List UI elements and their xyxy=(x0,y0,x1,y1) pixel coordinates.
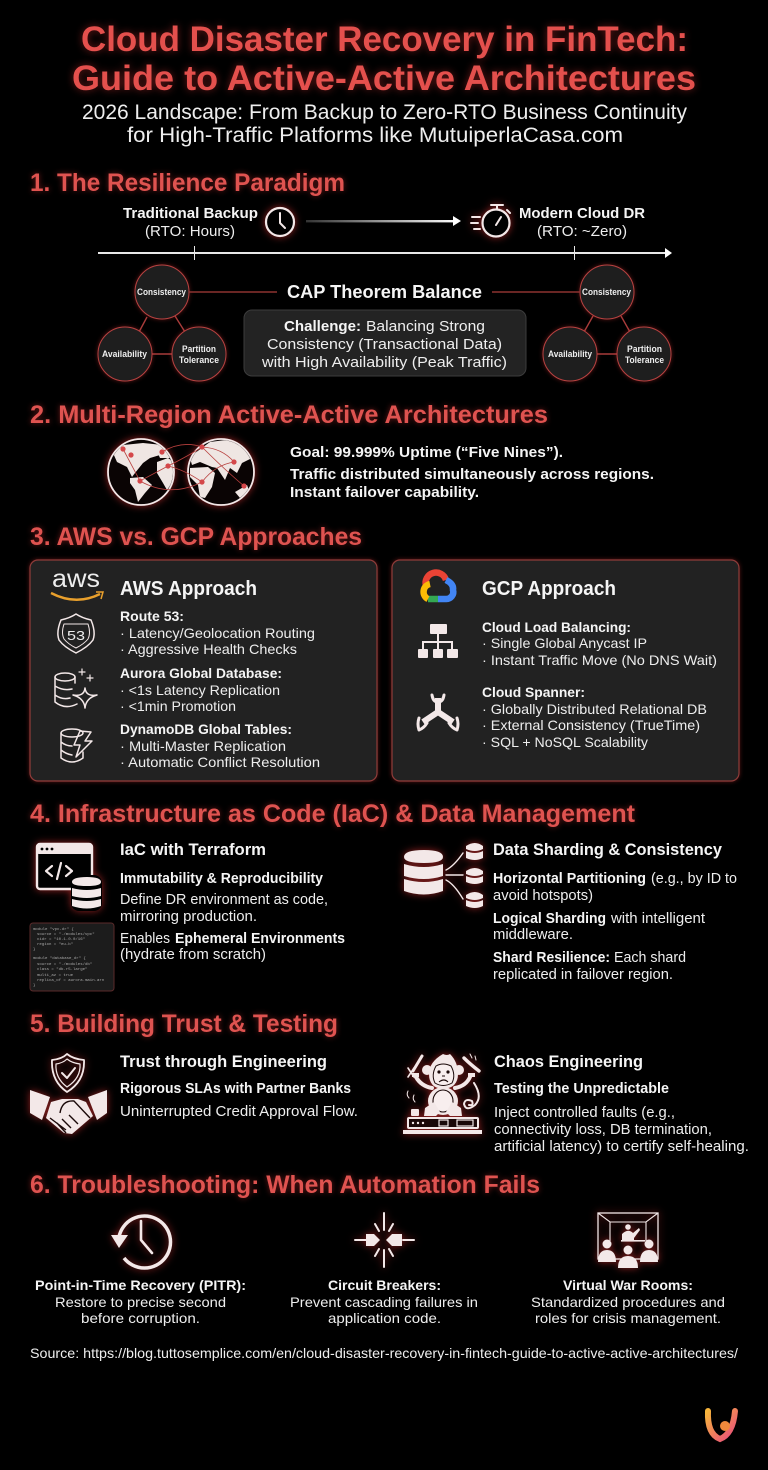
panel: AWS approach xyxy=(30,560,377,781)
diagram: CAP triangle left xyxy=(98,265,226,381)
text: data sharding: avoid hotspots) xyxy=(493,887,593,904)
code snippet: class = "db.r5.large" xyxy=(37,967,87,972)
icon: spanner xyxy=(418,695,458,730)
callout: challenge: Challenge: xyxy=(284,318,361,335)
text: chaos engineering: Testing the Unpredictable xyxy=(494,1080,669,1097)
source line: Source: https://blog.tuttosemplice.com/en/cloud-disaster-recovery-in-fintech-guide-to-active-active-architectures/ xyxy=(30,1345,738,1361)
code snippet: region = "eu-b" xyxy=(37,942,73,947)
text: IaC with Terraform: mirroring production. xyxy=(120,908,257,925)
text: route 53: Route 53: xyxy=(120,608,184,624)
diagram: CAP triangle right: Partition xyxy=(627,344,662,354)
text: aurora: Aurora Global Database: xyxy=(120,665,282,681)
text: route 53: · Aggressive Health Checks xyxy=(120,641,297,657)
heading: AWS approach: AWS Approach xyxy=(120,578,257,600)
text: cloud load balancing: · Single Global Anycast IP xyxy=(482,635,647,651)
text: dynamodb: · Multi-Master Replication xyxy=(120,738,286,754)
text: IaC with Terraform: Immutability & Reproducibility xyxy=(120,870,324,887)
title: Cloud Disaster Recovery in FinTech: xyxy=(81,20,688,59)
text: PITR: Point-in-Time Recovery (PITR): xyxy=(35,1277,246,1293)
code snippet: } xyxy=(33,983,35,988)
text: virtual war rooms xyxy=(531,1277,725,1326)
icon: dynamodb xyxy=(61,729,92,762)
text: data sharding: replicated in failover region. xyxy=(493,966,673,983)
diagram: CAP triangle right: Tolerance xyxy=(625,355,664,365)
text: circuit breakers: application code. xyxy=(328,1310,441,1326)
callout: challenge: Consistency (Transactional Data) xyxy=(267,336,502,353)
text: PITR: before corruption. xyxy=(81,1310,200,1326)
text: cloud spanner: · Globally Distributed Relational DB xyxy=(482,701,707,717)
text: cloud spanner xyxy=(482,684,707,750)
icon: globes with network xyxy=(108,439,254,505)
text: data sharding: Shard Resilience: xyxy=(493,949,610,966)
text: data sharding: middleware. xyxy=(493,926,573,943)
heading: section 6: 6. Troubleshooting: When Automation Fails xyxy=(30,1171,540,1199)
icon: circuit breaker xyxy=(355,1213,414,1267)
text: cloud load balancing xyxy=(482,619,717,668)
connectors: CAP heading xyxy=(189,291,580,293)
heading: section 1: 1. The Resilience Paradigm xyxy=(30,169,345,197)
text: cloud spanner: · External Consistency (TrueTime) xyxy=(482,717,700,733)
icon: load balancer xyxy=(418,624,458,658)
text: cloud load balancing: Cloud Load Balancing: xyxy=(482,619,631,635)
icon: route 53 shield xyxy=(58,614,94,653)
text: data sharding: (e.g., by ID to xyxy=(651,870,737,887)
text: chaos engineering: connectivity loss, DB termination, xyxy=(494,1121,712,1138)
text: goal xyxy=(290,444,654,501)
text: IaC with Terraform: IaC with Terraform xyxy=(120,840,266,859)
text: chaos engineering: artificial latency) to certify self-healing. xyxy=(494,1138,749,1155)
icon: history clock xyxy=(111,1216,171,1268)
text: trust through engineering xyxy=(120,1052,358,1120)
text: IaC with Terraform: Define DR environment as code, xyxy=(120,891,328,908)
text: circuit breakers: Prevent cascading failures in xyxy=(290,1294,478,1310)
icon: stopwatch xyxy=(471,205,510,236)
code snippet: module "vpc-dr" { xyxy=(33,927,74,932)
text: circuit breakers: Circuit Breakers: xyxy=(328,1277,441,1293)
text: IaC with Terraform: (hydrate from scratch) xyxy=(120,946,266,963)
code snippet: cidr = "10.1.0.0/16" xyxy=(37,937,85,942)
icon: aws logo xyxy=(51,565,103,600)
text: aurora xyxy=(120,665,282,714)
text: dynamodb xyxy=(120,721,320,770)
text: virtual war rooms: Standardized procedures and xyxy=(531,1294,725,1310)
text: goal: Traffic distributed simultaneously across regions. xyxy=(290,466,654,483)
diagram: CAP triangle right xyxy=(543,265,671,381)
icon: code window with database xyxy=(37,844,102,911)
heading: GCP approach: GCP Approach xyxy=(482,578,616,600)
text: cloud load balancing: · Instant Traffic Move (No DNS Wait) xyxy=(482,652,717,668)
heading: section 3: 3. AWS vs. GCP Approaches xyxy=(30,523,362,551)
icon: war room xyxy=(598,1213,658,1268)
subtitle: 2026 Landscape: From Backup to Zero-RTO Business Continuity xyxy=(82,101,687,124)
heading: section 4: 4. Infrastructure as Code (IaC) & Data Management xyxy=(30,800,636,828)
callout: challenge: with High Availability (Peak Traffic) xyxy=(261,354,507,371)
text: aurora: · <1min Promotion xyxy=(120,698,236,714)
text: goal: Instant failover capability. xyxy=(290,484,479,501)
callout: challenge: Balancing Strong xyxy=(366,318,485,335)
text: circuit breakers xyxy=(290,1277,478,1326)
heading: CAP theorem: CAP Theorem Balance xyxy=(287,282,482,302)
code snippet: replica_of = aurora.main.arn xyxy=(37,978,105,983)
text: PITR: Restore to precise second xyxy=(55,1294,226,1310)
text: goal: Goal: 99.999% Uptime (“Five Nines”). xyxy=(290,444,563,461)
code snippet: } xyxy=(33,947,35,952)
heading: section 2: 2. Multi-Region Active-Active Architectures xyxy=(30,401,548,429)
subtitle: for High-Traffic Platforms like MutuiperlaCasa.com xyxy=(127,124,623,147)
diagram: CAP triangle left: Consistency xyxy=(137,287,186,297)
label: traditional backup: (RTO: Hours) xyxy=(145,223,235,240)
text: aurora: · <1s Latency Replication xyxy=(120,682,280,698)
code snippet: multi_az = true xyxy=(37,973,74,978)
diagram: CAP triangle left: Partition xyxy=(182,344,216,354)
text: trust through engineering: Uninterrupted Credit Approval Flow. xyxy=(120,1103,358,1120)
text: chaos engineering: Inject controlled faults (e.g., xyxy=(494,1104,675,1121)
diagram: CAP triangle left: Tolerance xyxy=(179,355,219,365)
text: trust through engineering: Rigorous SLAs with Partner Banks xyxy=(120,1080,351,1097)
text: route 53: · Latency/Geolocation Routing xyxy=(120,625,315,641)
text: data sharding: with intelligent xyxy=(610,910,706,927)
icon: route 53 shield: 53 xyxy=(67,628,85,643)
text: route 53 xyxy=(120,608,315,657)
text: data sharding: Horizontal Partitioning xyxy=(493,870,646,887)
subtitle xyxy=(82,101,687,147)
text: chaos engineering: Chaos Engineering xyxy=(494,1052,643,1071)
label: traditional backup xyxy=(123,205,258,240)
icon: brand logo xyxy=(708,1411,735,1439)
code snippet: source = "./modules/db" xyxy=(37,962,92,967)
diagram: CAP triangle right: Consistency xyxy=(582,287,631,297)
arrow: backup to DR xyxy=(306,216,461,226)
timeline axis xyxy=(98,246,672,260)
icon: shield and handshake xyxy=(30,1054,107,1134)
text: data sharding xyxy=(493,840,737,983)
icon: aurora database xyxy=(55,669,97,708)
text: IaC with Terraform: Enables xyxy=(120,930,170,947)
text: chaos engineering xyxy=(494,1052,749,1155)
icon: data sharding xyxy=(404,843,483,908)
text: data sharding: Logical Sharding xyxy=(493,910,606,927)
label: modern cloud DR: (RTO: ~Zero) xyxy=(537,223,627,240)
text: data sharding: Each shard xyxy=(614,949,686,966)
text: trust through engineering: Trust through Engineering xyxy=(120,1052,327,1071)
title: Guide to Active-Active Architectures xyxy=(72,59,696,98)
code snippet: module "database_dr" { xyxy=(33,956,86,961)
text: dynamodb: DynamoDB Global Tables: xyxy=(120,721,292,737)
text: virtual war rooms: roles for crisis management. xyxy=(535,1310,721,1326)
text: data sharding: Data Sharding & Consistency xyxy=(493,840,723,859)
text: PITR xyxy=(35,1277,246,1326)
label: traditional backup: Traditional Backup xyxy=(123,205,258,222)
heading: section 5: 5. Building Trust & Testing xyxy=(30,1010,338,1038)
text: IaC with Terraform: Ephemeral Environments xyxy=(175,930,345,947)
text: cloud spanner: Cloud Spanner: xyxy=(482,684,585,700)
code snippet: source = "./modules/vpc" xyxy=(37,932,95,937)
label: modern cloud DR: Modern Cloud DR xyxy=(519,205,645,222)
icon: clock xyxy=(266,208,294,236)
icon: google cloud logo xyxy=(424,573,453,599)
icon: aws logo: aws xyxy=(52,565,100,593)
text: dynamodb: · Automatic Conflict Resolution xyxy=(120,754,320,770)
label: modern cloud DR xyxy=(519,205,645,240)
diagram: CAP triangle right: Availability xyxy=(548,349,592,359)
title xyxy=(72,20,696,98)
text: virtual war rooms: Virtual War Rooms: xyxy=(563,1277,693,1293)
icon: chaos monkey xyxy=(403,1054,482,1134)
panel: GCP approach xyxy=(392,560,739,781)
text: cloud spanner: · SQL + NoSQL Scalability xyxy=(482,734,648,750)
text: IaC with Terraform xyxy=(120,840,345,963)
callout: challenge xyxy=(244,310,526,376)
code snippet xyxy=(30,923,114,991)
diagram: CAP triangle left: Availability xyxy=(102,349,147,359)
